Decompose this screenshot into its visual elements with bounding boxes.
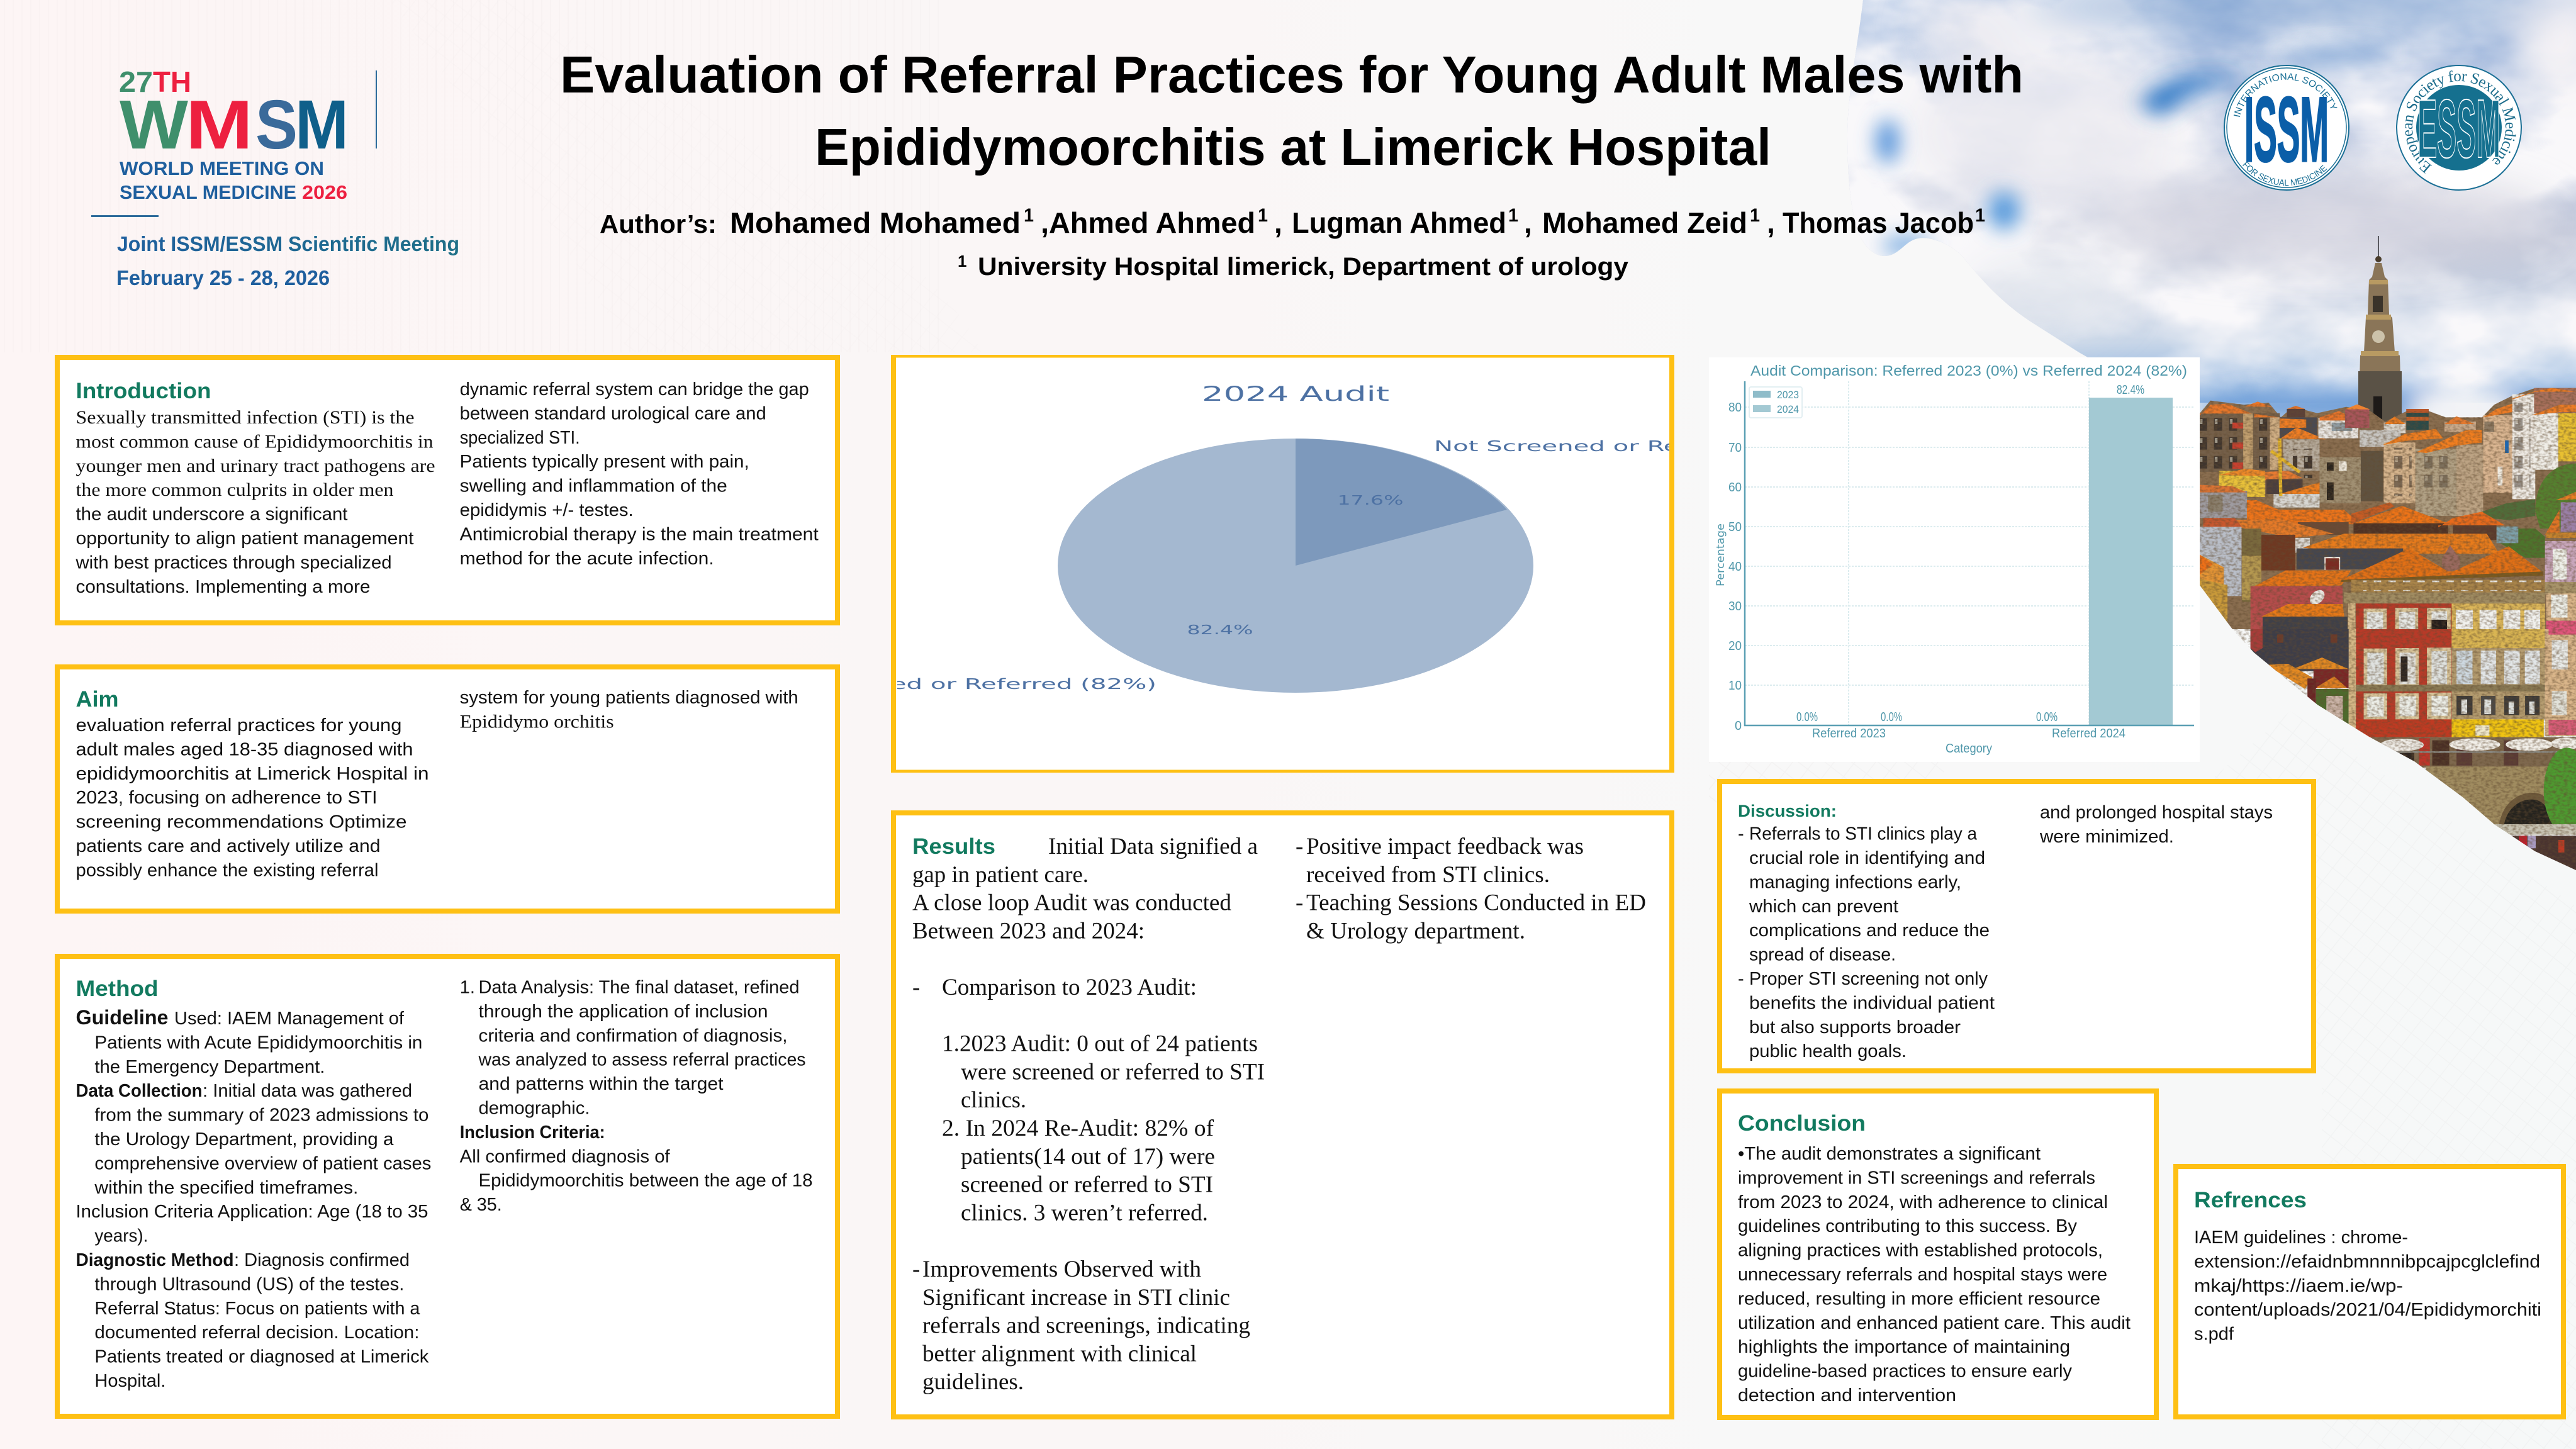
text: results column 1: 1.2023 Audit: 0 out of 24 patients xyxy=(942,1031,1258,1057)
y axis title: Percentage xyxy=(1715,523,1727,586)
legend: 2023 xyxy=(1777,389,1799,401)
text: results column 1: were screened or referred to STI xyxy=(961,1059,1265,1085)
logo: ISSM: FOR SEXUAL MEDICINE xyxy=(2243,162,2327,186)
conference logo: 27th WMSM: M xyxy=(295,86,349,164)
text: aim column 2: Epididymo orchitis xyxy=(460,711,614,732)
text: introduction column 2: method for the acute infection. xyxy=(460,549,714,569)
text: discussion column 1: managing infections early, xyxy=(1749,872,1961,892)
text: results column 2 xyxy=(1296,834,1646,944)
slice labels xyxy=(897,440,1669,691)
text: results column 2: - xyxy=(1296,834,1303,859)
authors: Lugman Ahmed xyxy=(1292,206,1506,239)
text: conclusion body: detection and intervention xyxy=(1738,1385,1956,1406)
text: introduction column 1 xyxy=(75,407,435,597)
panel: references xyxy=(2176,1166,2563,1417)
y axis tick labels: 50 xyxy=(1728,520,1742,534)
text: references body: IAEM guidelines : chrome- xyxy=(2194,1228,2408,1248)
text: introduction column 2: epididymis +/- testes. xyxy=(460,500,634,520)
text: discussion column 1: Proper STI screening not only xyxy=(1749,969,1988,989)
authors: ,Ahmed Ahmed xyxy=(1041,206,1255,239)
text: discussion column 1: crucial role in identifying and xyxy=(1749,848,1985,868)
text: method column 2: demographic. xyxy=(478,1099,590,1119)
text: discussion column 2: were minimized. xyxy=(2039,827,2174,847)
text: conclusion body: unnecessary referrals and hospital stays were xyxy=(1738,1265,2107,1285)
text: method column 2: and patterns within the target xyxy=(478,1074,724,1094)
authors: 1 xyxy=(1024,205,1034,226)
text: references body xyxy=(2194,1228,2541,1345)
text: method column 2: Inclusion Criteria: xyxy=(460,1122,605,1143)
conference logo: 27th WMSM: WORLD MEETING ON xyxy=(120,157,324,179)
bar: referred 2024 xyxy=(2089,398,2173,725)
authors: , xyxy=(1767,206,1775,239)
text: aim column 1: epididymoorchitis at Limerick Hospital in xyxy=(76,764,429,784)
text: conclusion body: from 2023 to 2024, with adherence to clinical xyxy=(1738,1192,2108,1212)
text: discussion column 1: benefits the individual patient xyxy=(1749,993,1995,1013)
axes xyxy=(1745,381,2194,725)
text: aim column 1 xyxy=(76,715,429,880)
conference logo: 27th WMSM: M xyxy=(186,86,253,164)
text: results column 1: screened or referred to STI xyxy=(961,1172,1213,1198)
slice labels: Not Screened or Referred (18%) xyxy=(1434,438,1839,455)
text: method column 1: : Initial data was gathered xyxy=(203,1081,412,1101)
panel: bar chart audit comparison xyxy=(1709,357,2200,762)
text: introduction column 2: Antimicrobial therapy is the main treatment xyxy=(460,524,819,544)
bar value labels: 0.0% xyxy=(1881,710,1902,724)
heading: discussion: Discussion: xyxy=(1738,802,1837,820)
clock tower xyxy=(2358,236,2402,428)
title xyxy=(560,45,2024,176)
y axis tick labels: 70 xyxy=(1728,441,1742,455)
text: introduction column 1: the more common culprits in older men xyxy=(76,479,394,500)
chart title: 2024 Audit xyxy=(1202,382,1389,406)
text: results column 1: - xyxy=(912,975,920,1000)
x axis labels xyxy=(1812,727,2125,756)
logo: ISSM xyxy=(2224,65,2349,191)
conference logo: 27th WMSM: TH xyxy=(153,65,191,98)
text: introduction column 2: Patients typically present with pain, xyxy=(460,452,749,472)
text: results column 1: Initial Data signified a xyxy=(1048,834,1258,859)
text: discussion column 1: but also supports broader xyxy=(1749,1017,1961,1038)
text: results column 1: - xyxy=(912,1256,920,1282)
text: method column 1: comprehensive overview of patient cases xyxy=(94,1153,431,1173)
conference logo: 27th WMSM: February 25 - 28, 2026 xyxy=(116,266,330,289)
text: introduction column 2: specialized STI. xyxy=(460,428,580,448)
text: aim column 2 xyxy=(460,688,798,732)
text: method column 1: Used: IAEM Management of xyxy=(174,1009,405,1029)
text: introduction column 1: the audit underscore a significant xyxy=(76,505,347,525)
text: results column 1: better alignment with clinical xyxy=(922,1341,1197,1367)
text: references body: content/uploads/2021/04/Epididymorchiti xyxy=(2194,1300,2541,1320)
text: method column 2: Epididymoorchitis between the age of 18 xyxy=(478,1171,813,1191)
text: introduction column 1: Sexually transmitted infection (STI) is the xyxy=(76,407,414,428)
text: conclusion body xyxy=(1738,1144,2131,1406)
bar value labels xyxy=(1796,383,2144,724)
conference logo: 27th WMSM: Joint ISSM/ESSM Scientific Meeting xyxy=(117,232,459,255)
conference logo: 27th WMSM: 27 xyxy=(119,65,153,98)
y axis tick labels: 80 xyxy=(1728,401,1742,415)
affiliation: 1 xyxy=(958,252,966,271)
text: results column 2: - xyxy=(1296,890,1303,916)
text: results column 1: Significant increase in STI clinic xyxy=(922,1285,1230,1311)
text: aim column 1: possibly enhance the existing referral xyxy=(76,860,379,880)
text: results column 1: guidelines. xyxy=(922,1369,1024,1395)
panel: results xyxy=(893,813,1672,1417)
text: method column 2 xyxy=(460,978,813,1215)
heading: method: Method xyxy=(76,976,159,1001)
text: method column 1: the Emergency Department. xyxy=(94,1057,325,1077)
lower city block xyxy=(2251,629,2576,870)
heading: aim: Aim xyxy=(76,687,118,712)
text: introduction column 1: consultations. Implementing a more xyxy=(76,577,370,597)
text: introduction column 2: swelling and inflammation of the xyxy=(460,476,727,496)
text: method column 1: Guideline xyxy=(76,1006,169,1029)
y axis tick labels: 10 xyxy=(1728,679,1742,693)
text: discussion column 2 xyxy=(2039,803,2273,847)
text: method column 2: criteria and confirmation of diagnosis, xyxy=(478,1026,788,1046)
text: references body: extension://efaidnbmnnnibpcajpcglclefind xyxy=(2194,1251,2540,1272)
text: results column 1: Between 2023 and 2024: xyxy=(912,918,1145,944)
authors: 1 xyxy=(1508,205,1518,226)
slice labels: Screened or Referred (82%) xyxy=(804,676,1156,693)
y axis tick labels: 60 xyxy=(1728,481,1742,495)
sky clouds xyxy=(1825,0,2576,435)
text: discussion column 1: - xyxy=(1738,969,1744,989)
x axis labels: Referred 2023 xyxy=(1812,727,1886,741)
text: method column 1: documented referral decision. Location: xyxy=(94,1323,419,1343)
text: discussion column 1: - xyxy=(1738,824,1744,844)
text: conclusion body: aligning practices with established protocols, xyxy=(1738,1241,2103,1261)
logo: ISSM: INTERNATIONAL SOCIETY xyxy=(2234,73,2338,117)
y axis tick labels: 40 xyxy=(1728,560,1742,574)
text: method column 1: Hospital. xyxy=(94,1371,165,1391)
text: results column 1 xyxy=(912,834,1265,1395)
grid lines xyxy=(1745,381,2194,725)
text: method column 2: & 35. xyxy=(460,1195,502,1215)
authors: , xyxy=(1274,206,1282,239)
affiliation: University Hospital limerick, Department of urology xyxy=(978,253,1629,281)
title: Evaluation of Referral Practices for Young Adult Males with xyxy=(560,45,2024,104)
text: discussion column 1: which can prevent xyxy=(1749,897,1898,917)
text: method column 1: Data Collection xyxy=(76,1081,203,1101)
text: method column 1: : Diagnosis confirmed xyxy=(234,1250,410,1270)
text: method column 1: Referral Status: Focus on patients with a xyxy=(94,1299,420,1319)
bar value labels: 0.0% xyxy=(2036,710,2058,724)
panel: method xyxy=(57,956,837,1416)
text: results column 2: & Urology department. xyxy=(1306,918,1525,944)
text: aim column 1: 2023, focusing on adherence to STI xyxy=(76,788,378,808)
pie slices xyxy=(1058,439,1533,693)
panel: introduction xyxy=(57,357,837,623)
panel: conclusion xyxy=(1720,1091,2156,1418)
authors: Mohamed Mohamed xyxy=(730,206,1021,239)
legend xyxy=(1749,387,1802,418)
y axis tick labels xyxy=(1728,401,1742,733)
text: conclusion body: •The audit demonstrates a significant xyxy=(1738,1144,2041,1164)
text: conclusion body: utilization and enhanced patient care. This audit xyxy=(1738,1313,2131,1333)
city grain texture xyxy=(2200,388,2576,881)
text: conclusion body: reduced, resulting in more efficient resource xyxy=(1738,1289,2100,1309)
y axis tick labels: 0 xyxy=(1735,719,1742,733)
text: discussion column 1: spread of disease. xyxy=(1749,945,1896,965)
x axis labels: Referred 2024 xyxy=(2052,727,2125,741)
conference logo: 27th WMSM: SEXUAL MEDICINE xyxy=(120,181,296,203)
background photo: sky and Porto skyline xyxy=(1825,0,2576,881)
text: results column 1: referrals and screenings, indicating xyxy=(922,1313,1250,1339)
poster canvas: ISSM xyxy=(2244,78,2329,181)
text: method column 1: Diagnostic Method xyxy=(76,1250,234,1270)
text: method column 1: the Urology Department, providing a xyxy=(94,1129,394,1150)
slice labels: 82.4% xyxy=(1187,622,1253,637)
text: method column 1: from the summary of 2023 admissions to xyxy=(94,1105,428,1126)
slice labels: 17.6% xyxy=(1338,493,1403,508)
text: method column 2: was analyzed to assess referral practices xyxy=(478,1050,805,1070)
panel: pie chart 2024 audit xyxy=(891,355,1674,773)
title: Epididymoorchitis at Limerick Hospital xyxy=(815,118,1771,176)
text: references body: s.pdf xyxy=(2194,1324,2234,1345)
text: aim column 1: evaluation referral practices for young xyxy=(76,715,401,736)
text: aim column 1: screening recommendations Optimize xyxy=(76,812,406,832)
authors: 1 xyxy=(1975,205,1985,226)
y axis tick labels: 20 xyxy=(1728,639,1742,653)
text: method column 1: years). xyxy=(94,1226,148,1246)
authors: Mohamed Zeid xyxy=(1542,206,1747,239)
text: introduction column 1: with best practices through specialized xyxy=(75,552,391,573)
conference logo: 27th WMSM: S xyxy=(255,86,298,164)
text: results column 1: clinics. 3 weren’t referred. xyxy=(961,1200,1208,1226)
text: discussion column 1: public health goals. xyxy=(1749,1041,1907,1061)
chart title: Audit Comparison: Referred 2023 (0%) vs Referred 2024 (82%) xyxy=(1750,362,2187,379)
panel: aim xyxy=(57,667,837,911)
text: results column 1: 2. In 2024 Re-Audit: 82% of xyxy=(942,1116,1214,1141)
text: discussion column 2: and prolonged hospital stays xyxy=(2040,803,2273,823)
text: results column 1: patients(14 out of 17) were xyxy=(961,1144,1215,1170)
y axis tick labels: 30 xyxy=(1728,600,1742,613)
x axis labels: Category xyxy=(1946,742,1992,756)
upper city block xyxy=(2200,388,2576,629)
text: conclusion body: improvement in STI screenings and referrals xyxy=(1738,1168,2095,1188)
text: method column 1: within the specified timeframes. xyxy=(94,1178,358,1198)
text: results column 1: clinics. xyxy=(961,1087,1026,1113)
heading: results: Results xyxy=(912,834,995,859)
bar value labels: 0.0% xyxy=(1796,710,1818,724)
bar value labels: 82.4% xyxy=(2117,383,2144,397)
text: aim column 1: adult males aged 18-35 diagnosed with xyxy=(76,739,413,759)
text: discussion column 1 xyxy=(1738,824,1995,1061)
text: method column 2: 1. xyxy=(460,978,475,998)
text: conclusion body: highlights the importance of maintaining xyxy=(1738,1337,2070,1357)
text: references body: mkaj/https://iaem.ie/wp- xyxy=(2194,1276,2403,1296)
authors: 1 xyxy=(1750,205,1760,226)
conference logo: 27th WMSM: 2026 xyxy=(302,181,347,203)
text: method column 1: Patients treated or diagnosed at Limerick xyxy=(94,1347,429,1367)
conference logo: 27th WMSM: W xyxy=(120,86,188,164)
text: method column 2: Data Analysis: The final dataset, refined xyxy=(478,978,799,998)
authors: 1 xyxy=(1258,205,1268,226)
text: results column 2: Teaching Sessions Conducted in ED xyxy=(1306,890,1646,916)
text: introduction column 2: dynamic referral system can bridge the gap xyxy=(460,379,809,400)
authors: Author’s: xyxy=(600,210,717,238)
authors: Thomas Jacob xyxy=(1783,206,1974,239)
text: introduction column 2: between standard urological care and xyxy=(460,403,766,423)
text: introduction column 1: most common cause of Epididymoorchitis in xyxy=(76,431,433,452)
text: method column 1: through Ultrasound (US) of the testes. xyxy=(94,1274,404,1294)
text: results column 1: gap in patient care. xyxy=(912,862,1089,888)
conference logo: 27th WMSM xyxy=(91,65,459,289)
logo: ESSM: European Society for Sexual Medicine xyxy=(2405,70,2516,174)
text: aim column 1: patients care and actively utilize and xyxy=(76,836,380,856)
legend: 2024 xyxy=(1777,403,1799,415)
text: method column 2: through the application of inclusion xyxy=(478,1002,768,1022)
text: aim column 2: system for young patients diagnosed with xyxy=(460,688,798,708)
text: conclusion body: guidelines contributing to this success. By xyxy=(1738,1216,2077,1236)
text: introduction column 2 xyxy=(460,379,819,569)
panel: discussion xyxy=(1720,781,2314,1071)
text: discussion column 1: complications and reduce the xyxy=(1749,920,1990,941)
heading: references: Refrences xyxy=(2194,1188,2307,1212)
text: discussion column 1: Referrals to STI clinics play a xyxy=(1749,824,1978,844)
text: method column 1: Patients with Acute Epididymoorchitis in xyxy=(94,1032,422,1053)
text: results column 1: Comparison to 2023 Audit: xyxy=(942,975,1197,1000)
text: results column 2: received from STI clinics. xyxy=(1306,862,1550,888)
text: conclusion body: guideline-based practices to ensure early xyxy=(1738,1362,2072,1382)
text: results column 1: A close loop Audit was conducted xyxy=(912,890,1231,916)
text: results column 2: Positive impact feedback was xyxy=(1306,834,1584,859)
text: method column 1: Inclusion Criteria Application: Age (18 to 35 xyxy=(76,1202,428,1222)
heading: conclusion: Conclusion xyxy=(1738,1111,1866,1136)
text: method column 1 xyxy=(76,1006,431,1391)
text: method column 2: All confirmed diagnosis of xyxy=(460,1146,671,1166)
authors: , xyxy=(1524,206,1532,239)
heading: introduction: Introduction xyxy=(76,379,211,403)
text: results column 1: Improvements Observed with xyxy=(922,1256,1201,1282)
text: introduction column 1: younger men and urinary tract pathogens are xyxy=(76,456,435,476)
text: introduction column 1: opportunity to align patient management xyxy=(76,529,414,549)
authors xyxy=(600,205,1985,239)
